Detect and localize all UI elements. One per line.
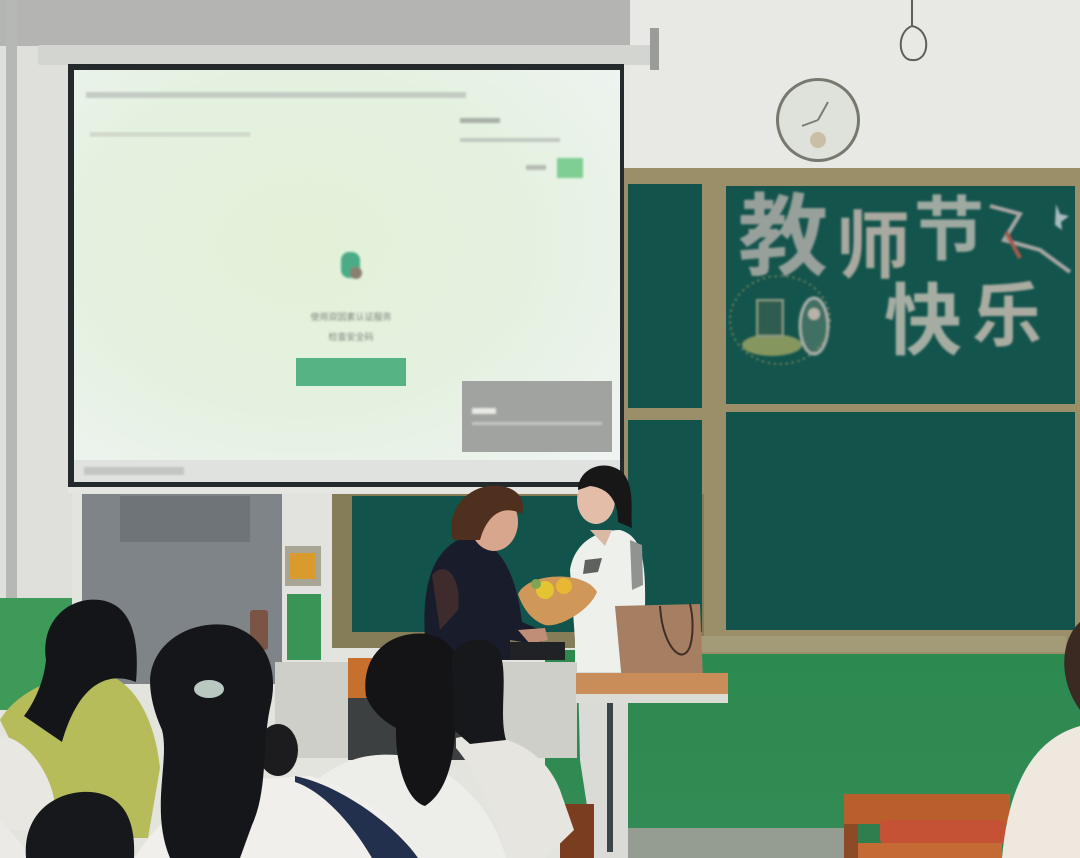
cable — [901, 0, 926, 60]
orange desks at right — [560, 794, 1010, 858]
flower bouquet — [518, 576, 597, 625]
screen green button — [296, 358, 406, 386]
screen browser bar — [86, 92, 466, 98]
lectern and table — [275, 642, 728, 760]
chalk star drawing — [990, 204, 1070, 272]
screen top right dialog — [460, 118, 583, 178]
screen caption text: 使用双因素认证服务 — [310, 311, 392, 322]
screen taskbar — [84, 467, 184, 475]
blackboard frame and panels — [332, 168, 1080, 654]
chalk picture — [730, 276, 830, 364]
student white shirt left — [0, 736, 134, 858]
student foreground with ponytail — [135, 624, 418, 858]
chalk title: 乐 — [972, 277, 1042, 355]
projector screen housing — [38, 28, 659, 70]
student presenting flowers — [570, 466, 645, 858]
screen caption text — [310, 311, 392, 342]
chalk title: 快 — [884, 277, 962, 365]
chalk title: 节 — [914, 191, 984, 269]
student far right — [1002, 622, 1080, 858]
screen caption text: 检查安全码 — [328, 331, 374, 342]
screen notification — [462, 381, 612, 452]
tote bag — [615, 604, 703, 682]
chalk title: 师 — [836, 205, 910, 288]
chalk title: 教 — [738, 188, 828, 288]
wall clock — [776, 78, 860, 162]
student yellow shirt — [0, 600, 160, 838]
screen logo icon — [341, 252, 362, 279]
student centre white shirts — [258, 634, 574, 858]
chalk title — [738, 188, 1042, 365]
lower door and switch panel — [82, 494, 332, 684]
green lower wall — [0, 598, 1080, 858]
projection screen — [68, 64, 624, 493]
teacher — [424, 486, 548, 660]
